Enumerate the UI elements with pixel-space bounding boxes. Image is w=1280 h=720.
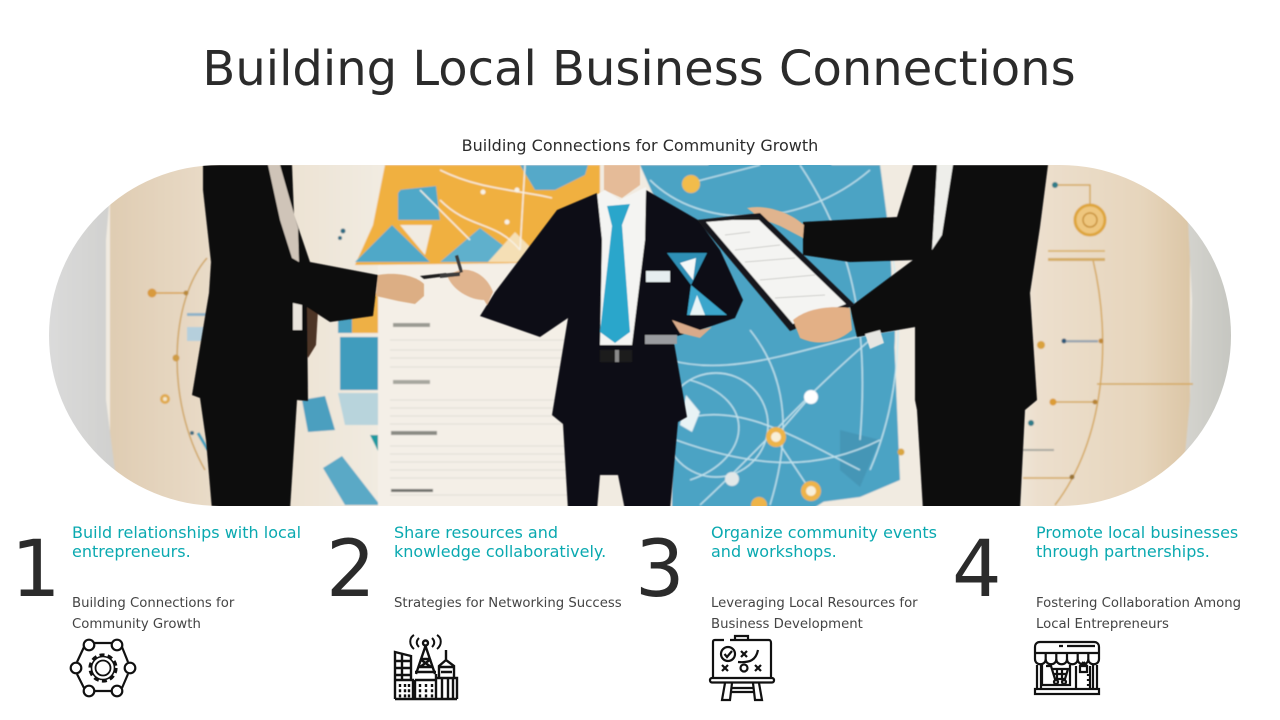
icon: city with antenna bbox=[394, 634, 458, 700]
step 1 heading: entrepreneurs. bbox=[72, 542, 191, 561]
step 2 heading: knowledge collaboratively. bbox=[394, 542, 606, 561]
orange top panel bbox=[355, 165, 600, 265]
step 3 heading bbox=[711, 523, 937, 561]
clipboard bbox=[697, 213, 855, 331]
step 3 description bbox=[711, 596, 918, 632]
icon: gear network bbox=[70, 638, 136, 698]
icon: strategy board on easel bbox=[708, 634, 776, 702]
step 4 description bbox=[1036, 596, 1241, 632]
right person bbox=[803, 165, 1048, 510]
right gold nodes bbox=[1023, 185, 1193, 505]
step 1 description bbox=[72, 596, 234, 632]
step 4 description: Local Entrepreneurs bbox=[1036, 617, 1169, 632]
step 3 heading: Organize community events bbox=[711, 523, 937, 542]
step 3 heading: and workshops. bbox=[711, 542, 837, 561]
left gold nodes bbox=[152, 258, 207, 470]
step 1 heading bbox=[72, 523, 301, 561]
step 2 number: 2 bbox=[326, 525, 376, 615]
middle person bbox=[604, 165, 640, 198]
step 4 description: Fostering Collaboration Among bbox=[1036, 596, 1241, 611]
step 4 heading: through partnerships. bbox=[1036, 542, 1210, 561]
title: Building Local Business Connections bbox=[202, 41, 1076, 97]
step 3 number: 3 bbox=[635, 525, 685, 615]
step 2 heading bbox=[394, 523, 606, 561]
step 4 heading bbox=[1036, 523, 1238, 561]
step 1 heading: Build relationships with local bbox=[72, 523, 301, 542]
left blue segments bbox=[337, 318, 353, 334]
step 1 number: 1 bbox=[11, 525, 61, 615]
left person bbox=[306, 306, 318, 358]
centre document panel bbox=[376, 296, 382, 506]
step 3 description: Business Development bbox=[711, 617, 863, 632]
step 3 description: Leveraging Local Resources for bbox=[711, 596, 918, 611]
subtitle: Building Connections for Community Growth bbox=[462, 136, 818, 155]
right network globe bbox=[674, 165, 896, 506]
step 4 number: 4 bbox=[952, 525, 1002, 615]
backdrop bbox=[106, 165, 1192, 506]
hero image: business people exchanging documents bbox=[49, 165, 1231, 506]
step 4 heading: Promote local businesses bbox=[1036, 523, 1238, 542]
step 1 description: Building Connections for bbox=[72, 596, 234, 611]
hourglass logo bbox=[667, 253, 727, 315]
icon: shop with cart bbox=[1034, 640, 1100, 696]
step 2 heading: Share resources and bbox=[394, 523, 558, 542]
step 2 description: Strategies for Networking Success bbox=[394, 596, 622, 611]
step 1 description: Community Growth bbox=[72, 617, 201, 632]
